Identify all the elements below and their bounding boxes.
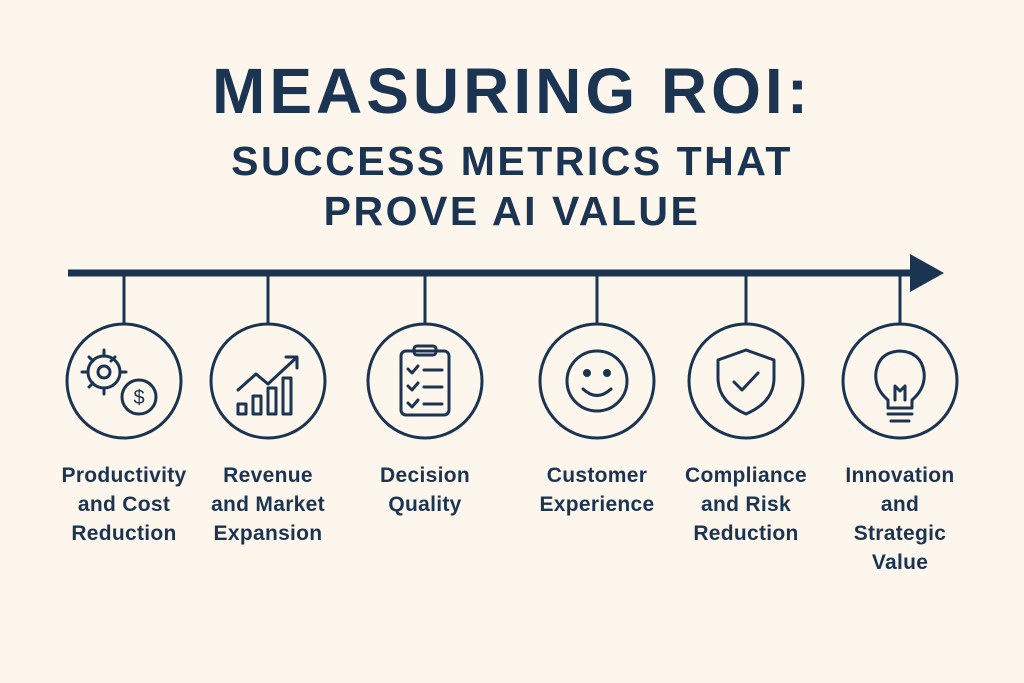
- icon: growth chart: [211, 324, 325, 438]
- label 3: [380, 464, 470, 516]
- label 4: Customer: [547, 464, 647, 487]
- label 2: and Market: [211, 493, 325, 516]
- arrow: [68, 254, 944, 292]
- label 1: and Cost: [78, 493, 170, 516]
- icon: smiley: [540, 324, 654, 438]
- label 5: Compliance: [685, 464, 807, 487]
- subtitle: PROVE AI VALUE: [324, 188, 700, 234]
- label 6: [845, 464, 955, 574]
- label 4: Experience: [539, 493, 655, 516]
- label 3: Decision: [380, 464, 470, 487]
- icon: shield: [689, 324, 803, 438]
- subtitle: SUCCESS METRICS THAT: [231, 138, 793, 184]
- icon: gear and dollar: $: [133, 387, 145, 409]
- label 4: [539, 464, 655, 516]
- label 1: Reduction: [71, 522, 177, 545]
- connectors: [124, 273, 900, 324]
- icon: clipboard: [368, 324, 482, 438]
- label 5: [685, 464, 807, 545]
- label 5: Reduction: [693, 522, 799, 545]
- label 6: Innovation: [845, 464, 955, 487]
- label 5: and Risk: [701, 493, 791, 516]
- label 2: [211, 464, 325, 545]
- icon: lightbulb: [843, 324, 957, 438]
- label 6: Value: [872, 551, 928, 574]
- subtitle: [231, 138, 793, 234]
- title: MEASURING ROI:: [212, 55, 812, 127]
- icon: gear and dollar: [67, 324, 181, 438]
- label 2: Revenue: [223, 464, 313, 487]
- label 1: Productivity: [62, 464, 186, 487]
- label 6: and: [881, 493, 919, 516]
- label 2: Expansion: [214, 522, 322, 545]
- label 6: Strategic: [854, 522, 946, 545]
- label 3: Quality: [388, 493, 462, 516]
- label 1: [62, 464, 186, 545]
